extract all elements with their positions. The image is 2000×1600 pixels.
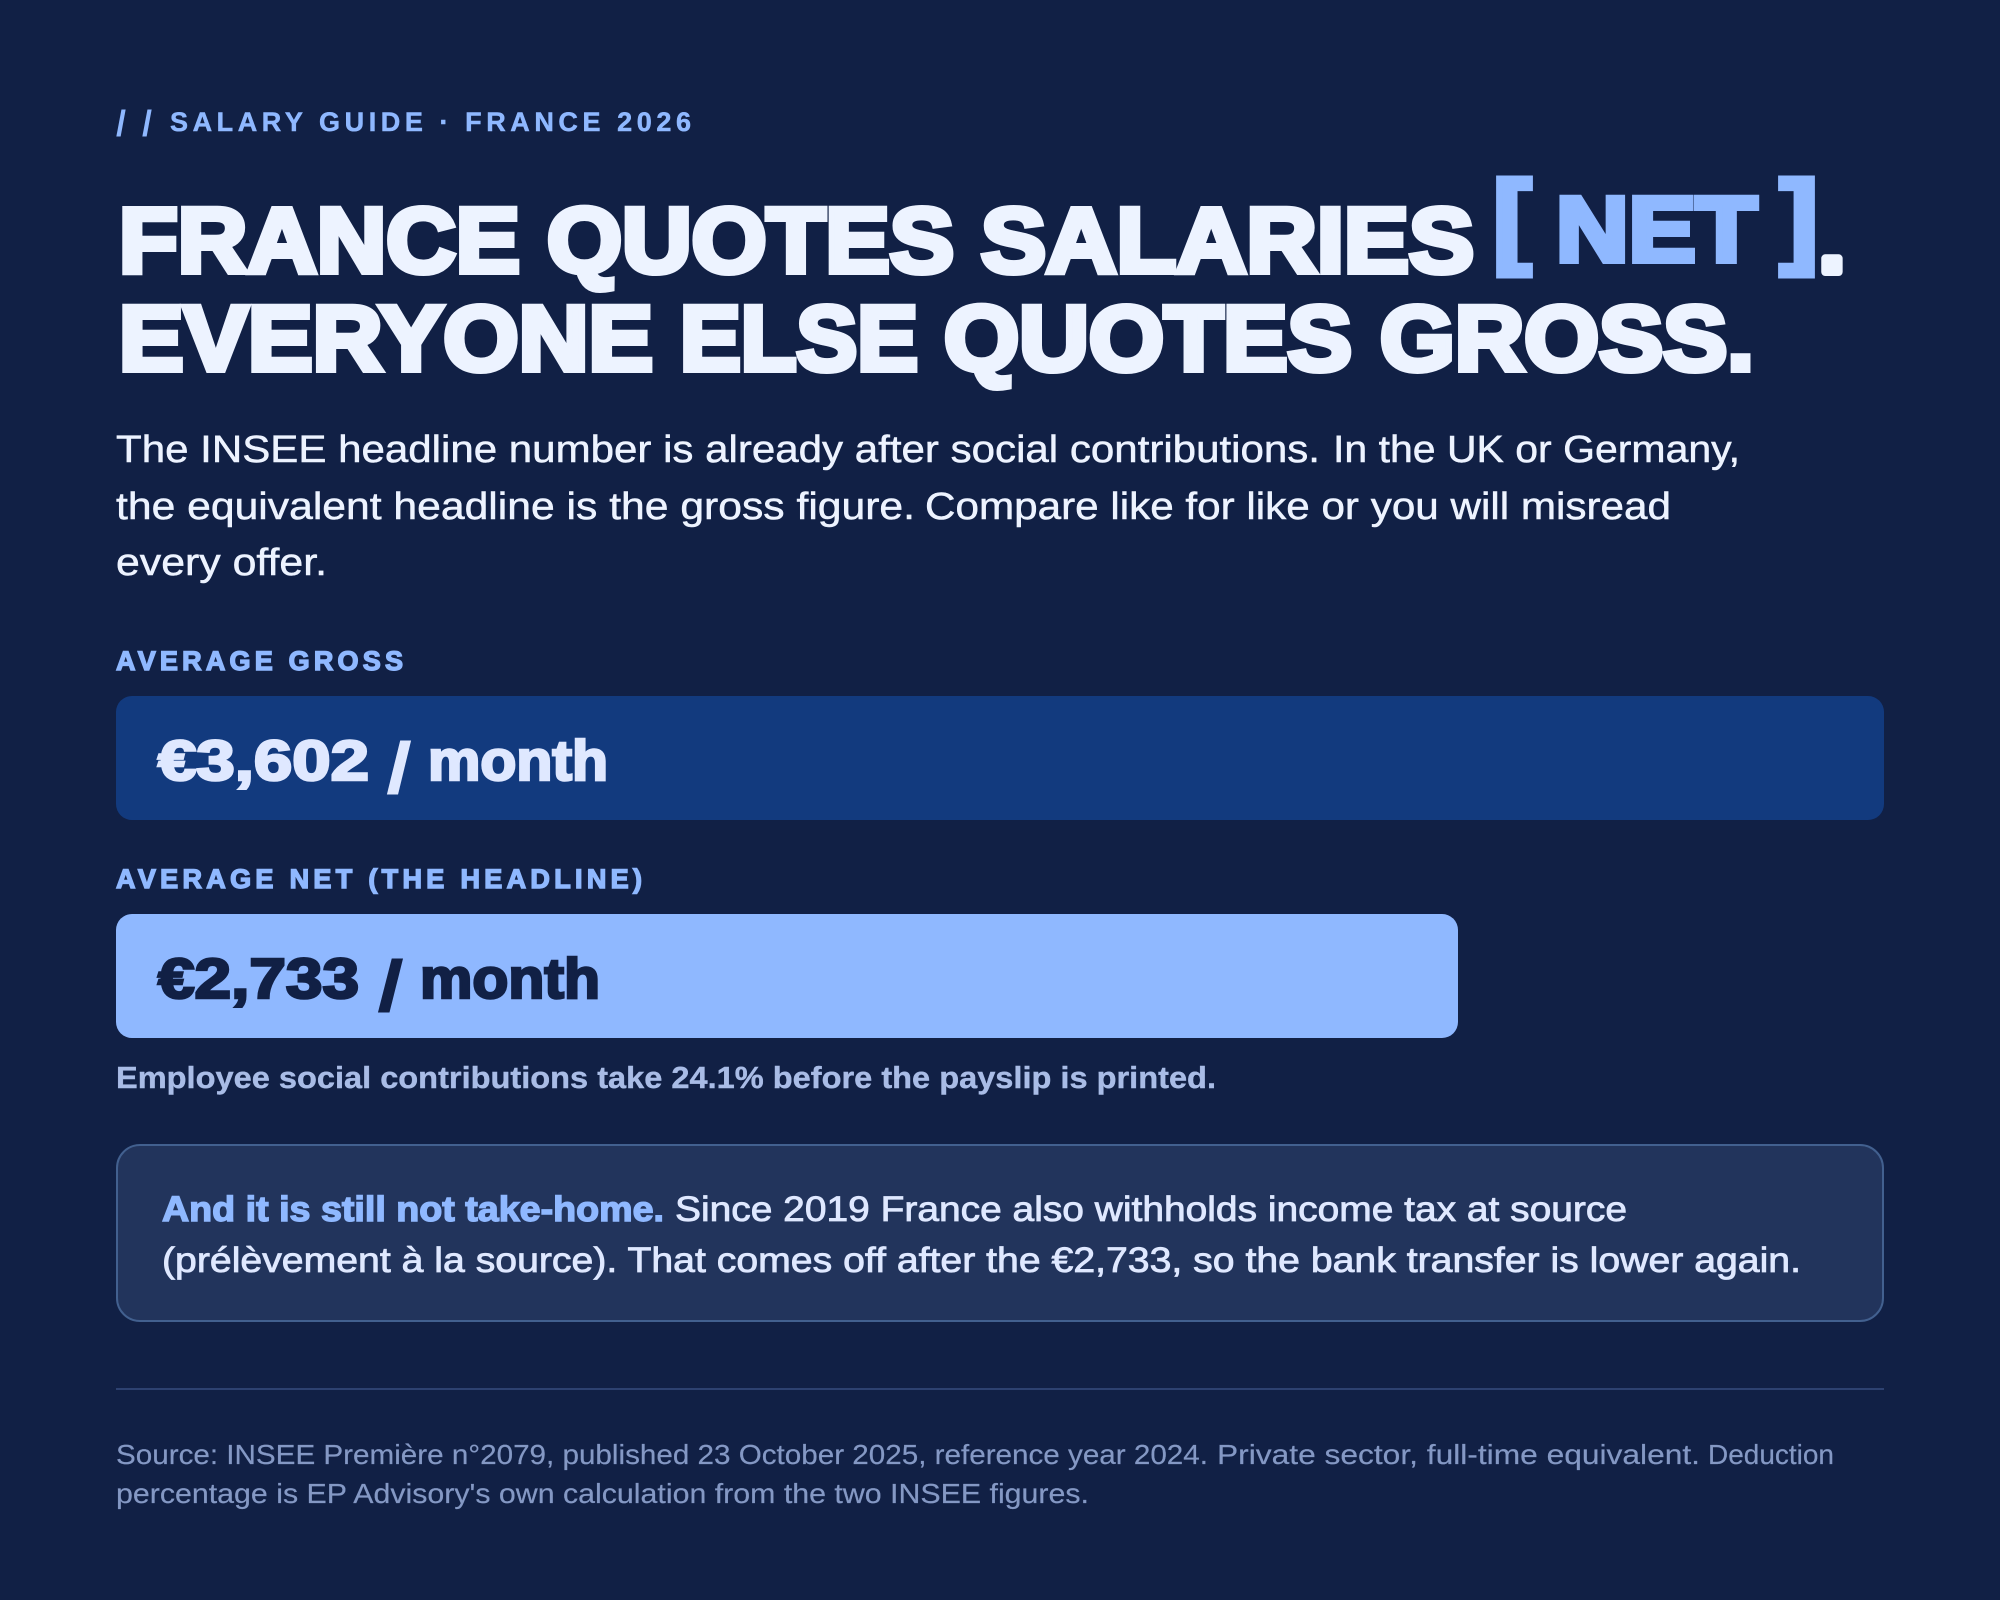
intro paragraph: the equivalent headline is the gross figure. [116, 486, 915, 528]
bar: average net: month [420, 947, 600, 1011]
title: SALARIES [981, 190, 1474, 292]
deduction note: Employee social contributions take 24.1% before the payslip is printed. [116, 1060, 1216, 1095]
eyebrow label [116, 103, 691, 144]
bar: average net: / [377, 947, 404, 1027]
eyebrow label: SALARY GUIDE · FRANCE 2026 [170, 107, 691, 137]
source note: Private sector, full-time equivalent. [1217, 1439, 1700, 1470]
title: ] [1780, 161, 1818, 277]
bar: average gross: €3,602 [158, 729, 369, 793]
bar: average net [116, 914, 1458, 1038]
title: . [1819, 190, 1845, 292]
title: FRANCE [119, 190, 520, 292]
title: QUOTES [944, 288, 1352, 390]
source note: Source: INSEE Première n°2079, published 23 October 2025, reference year 2024. [116, 1439, 1208, 1470]
bar: average net: €2,733 [158, 947, 359, 1011]
intro paragraph: Compare like for like or you will misread [925, 486, 1671, 528]
intro paragraph: every offer. [116, 542, 327, 584]
callout: (prélèvement à la source). That comes off after the €2,733, so the bank transfer is lower again. [162, 1241, 1801, 1280]
callout [117, 1145, 1883, 1321]
bar: average gross: / [386, 729, 412, 809]
source note: Deduction [1708, 1439, 1834, 1470]
title: NET [1556, 179, 1757, 281]
title [119, 161, 1845, 390]
eyebrow label: // [116, 103, 152, 144]
label: average gross: AVERAGE GROSS [116, 646, 403, 676]
source note [116, 1439, 1834, 1509]
title: EVERYONE [119, 288, 653, 390]
bar: average gross: month [428, 729, 608, 793]
title: GROSS. [1380, 288, 1754, 390]
bar: average gross [116, 696, 1884, 820]
title: QUOTES [547, 190, 954, 292]
callout: Since 2019 France also withholds income tax at source [675, 1190, 1627, 1229]
intro paragraph: In the UK or Germany, [1333, 429, 1740, 471]
callout: And it is still not take-home. [162, 1190, 664, 1229]
title: [ [1493, 161, 1531, 277]
source note: percentage is EP Advisory's own calculation from the two INSEE figures. [116, 1478, 1089, 1509]
intro paragraph [116, 429, 1740, 584]
label: average net: AVERAGE NET (THE HEADLINE) [116, 864, 642, 894]
intro paragraph: The INSEE headline number is already after social contributions. [116, 429, 1320, 471]
title: ELSE [680, 288, 918, 390]
